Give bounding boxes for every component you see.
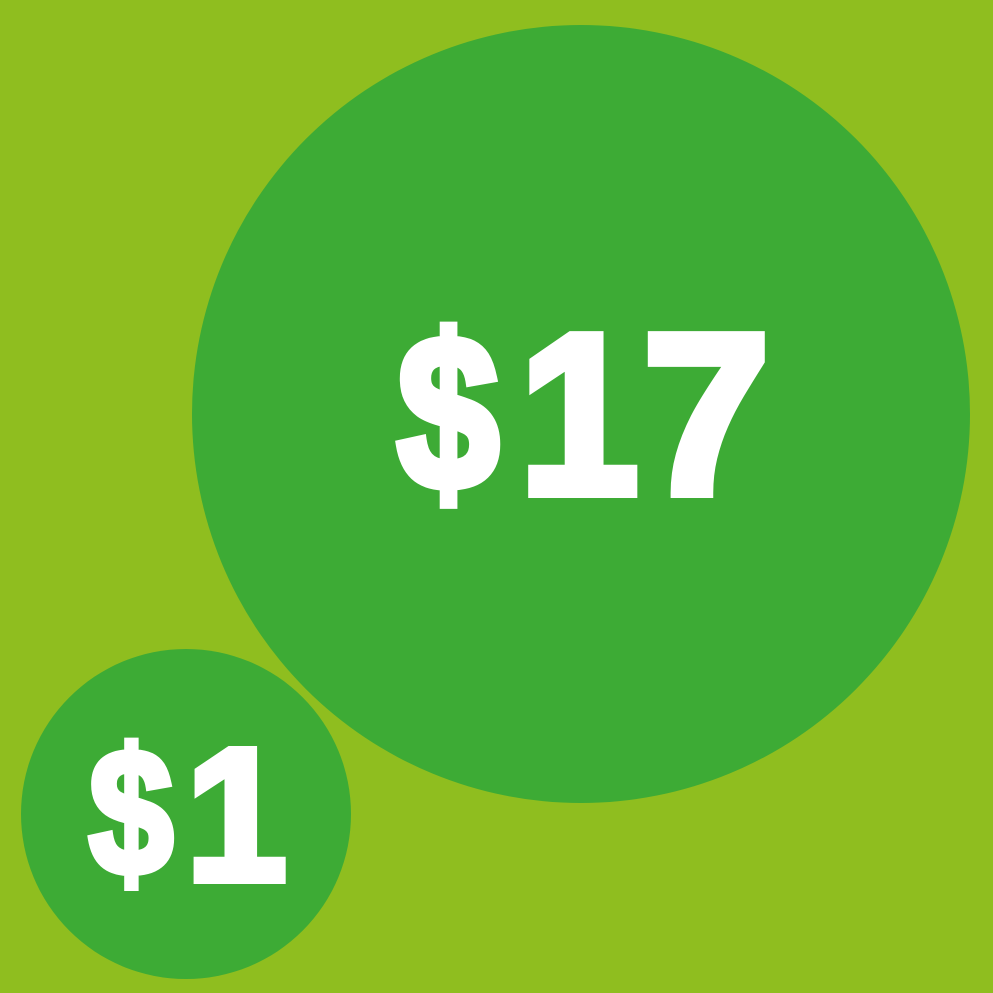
value: $17: 7 [643, 288, 770, 542]
value: $17: $ [397, 291, 499, 535]
value: $1: $ [89, 713, 173, 913]
value: $1 [89, 710, 287, 921]
small circle with $1 [21, 649, 351, 979]
large circle with $17 [192, 25, 970, 803]
value: $17 [397, 287, 770, 542]
value: $1: 1 [186, 710, 287, 921]
value: $17: 1 [519, 287, 639, 541]
